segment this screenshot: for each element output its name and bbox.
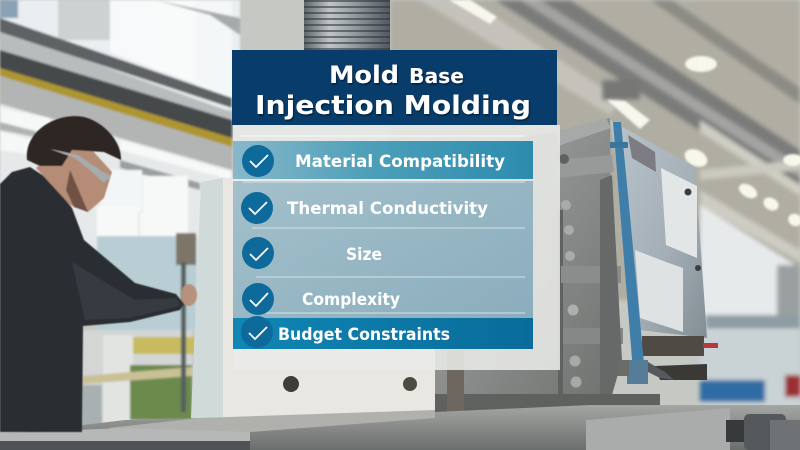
item: Size — [242, 237, 382, 269]
item: Budget Constraints — [233, 316, 533, 349]
blue pipe — [610, 122, 674, 384]
icon: threaded screw — [304, 0, 390, 50]
machine table — [0, 405, 800, 450]
left windows and beams — [0, 0, 240, 430]
glasses — [50, 149, 111, 183]
hand — [181, 284, 197, 306]
jacket — [0, 167, 184, 432]
item: Material Compatibility: Material Compatibility — [295, 152, 505, 172]
translucent white panel — [233, 125, 560, 370]
item: Complexity — [242, 283, 400, 315]
hair — [27, 116, 121, 166]
face and neck — [36, 150, 112, 212]
item: Budget Constraints: Budget Constraints — [278, 325, 450, 345]
title line 1 — [329, 61, 464, 89]
title banner — [232, 50, 557, 125]
ceiling right — [390, 0, 800, 410]
item: Complexity: Complexity — [302, 290, 400, 310]
control cabinet — [610, 120, 718, 380]
checklist panel — [233, 136, 533, 349]
metal mold column — [435, 118, 660, 418]
title line 1: Base — [409, 64, 464, 88]
white machine block — [191, 178, 438, 418]
item: Thermal Conductivity — [241, 192, 488, 224]
worker — [0, 116, 197, 432]
item: Size: Size — [346, 245, 382, 265]
title line 1: Mold — [329, 61, 399, 89]
item: Thermal Conductivity: Thermal Conductivity — [287, 199, 488, 219]
title line 2: Injection Molding — [255, 91, 531, 121]
item: Material Compatibility — [233, 141, 533, 179]
